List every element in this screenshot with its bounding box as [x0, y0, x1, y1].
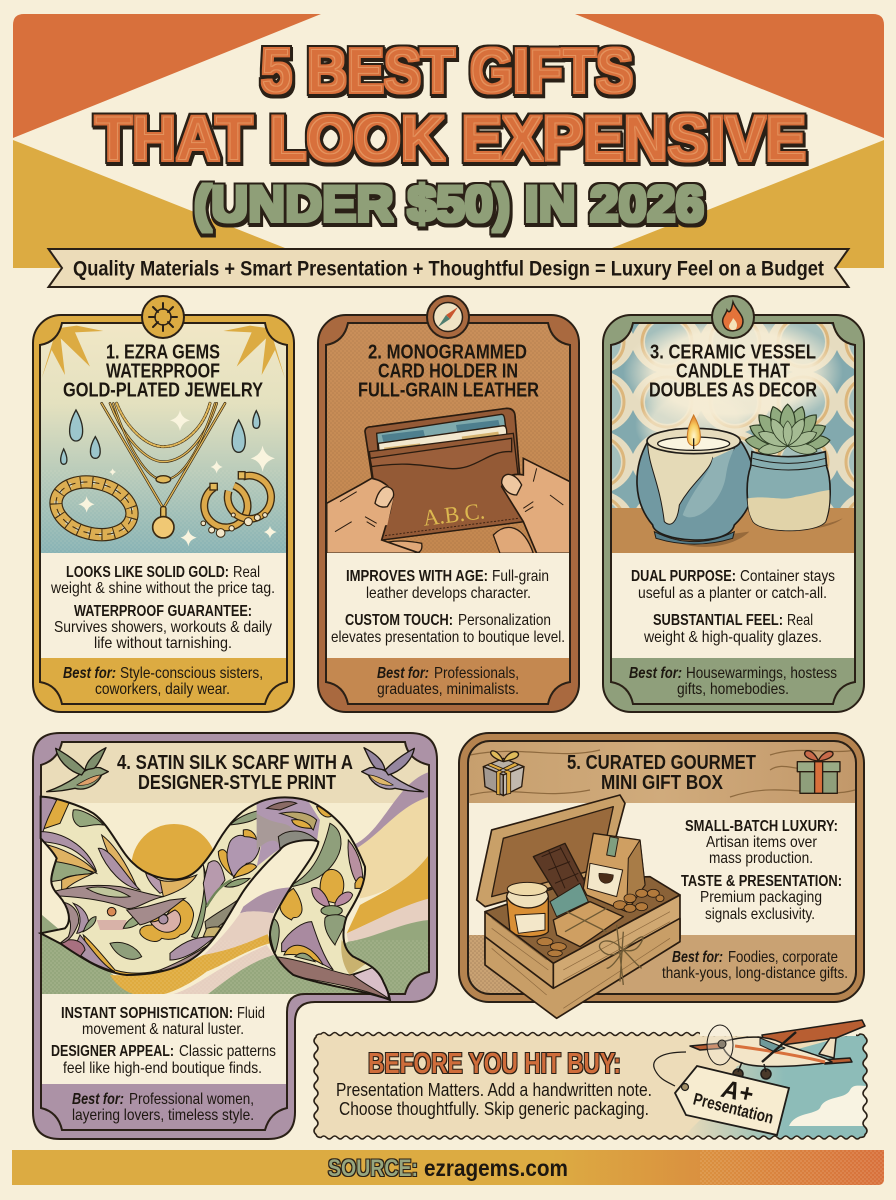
text block: best for: graduates, minimalists. — [377, 681, 519, 698]
illustration: scarf — [40, 793, 390, 1000]
text block: benefits: IMPROVES WITH AGE: — [346, 568, 488, 585]
panel: before you hit buy — [314, 1020, 870, 1140]
illustration: candle and succulent — [612, 324, 854, 658]
text block: benefits: signals exclusivity. — [705, 906, 815, 923]
text block: best for: Housewarmings, hostess — [686, 665, 837, 682]
text block: best for: Best for: — [629, 665, 682, 682]
text block: best for: Best for: — [72, 1091, 124, 1108]
header wood band — [468, 741, 856, 803]
illustration: leather card holder in hands — [326, 323, 570, 704]
heading: FULL-GRAIN LEATHER — [358, 380, 539, 402]
text block: benefits: Container stays — [740, 568, 835, 585]
text block: benefits: Real — [787, 612, 813, 629]
text block: benefits: LOOKS LIKE SOLID GOLD: — [66, 564, 229, 581]
text block: benefits: Full-grain — [492, 568, 549, 585]
text block: best for: Best for: — [377, 665, 429, 682]
heading: MINI GIFT BOX — [601, 772, 724, 794]
title: (UNDER $50) IN 2026 — [194, 176, 704, 232]
header banner — [13, 14, 884, 268]
text block: benefits: CUSTOM TOUCH: — [345, 612, 453, 629]
text block: best for — [662, 949, 848, 982]
heading: BEFORE YOU HIT BUY: — [368, 1048, 621, 1080]
icon: purple bird — [362, 748, 423, 792]
text block: benefits — [50, 564, 275, 652]
heading — [358, 342, 539, 402]
text block — [336, 1080, 652, 1119]
text block: benefits: weight & high-quality glazes. — [643, 629, 822, 646]
text block: best for: Foodies, corporate — [728, 949, 838, 966]
card frame — [33, 733, 437, 1139]
illustration: jewelry — [41, 324, 286, 658]
text block: benefits: SUBSTANTIAL FEEL: — [653, 612, 783, 629]
text block: best for — [377, 665, 519, 698]
monogram: A.B.C. — [422, 498, 486, 531]
panel: 1 Ezra Gems jewelry — [33, 296, 294, 712]
text block: benefits: movement & natural luster. — [82, 1021, 244, 1038]
heading: 1. EZRA GEMS — [106, 342, 220, 364]
heading: GOLD-PLATED JEWELRY — [63, 380, 264, 402]
text block: best for: Professionals, — [434, 665, 519, 682]
panel: 2 Monogrammed card holder — [318, 296, 579, 712]
heading: 4. SATIN SILK SCARF WITH A — [117, 752, 353, 774]
text block: benefits: DESIGNER APPEAL: — [51, 1043, 174, 1060]
text block: benefits: Survives showers, workouts & daily — [54, 619, 272, 636]
scalloped box — [314, 1032, 867, 1139]
icon: sun badge — [142, 296, 184, 338]
text block: benefits: Premium packaging — [700, 889, 822, 906]
title: 5 BEST GIFTS — [261, 37, 633, 106]
illustration: airplane — [690, 1020, 865, 1079]
text block: benefits: Personalization — [458, 612, 551, 629]
card frame — [459, 733, 864, 1002]
card frame — [318, 315, 579, 712]
icon: grey gift box — [483, 751, 524, 796]
text block: benefits: INSTANT SOPHISTICATION: — [61, 1005, 233, 1022]
text block: benefits: life without tarnishing. — [94, 635, 232, 652]
source bar: SOURCE: — [328, 1155, 418, 1182]
text block: benefits: feel like high-end boutique finds. — [63, 1060, 262, 1077]
text block: benefits — [51, 1005, 276, 1077]
sky and cloud — [689, 1034, 866, 1138]
text block: best for: Best for: — [63, 665, 116, 682]
text block: benefits: Fluid — [237, 1005, 265, 1022]
icon: green bird — [47, 748, 108, 792]
heading — [117, 752, 353, 794]
text block: benefits: useful as a planter or catch-all. — [638, 585, 827, 602]
subtitle ribbon — [48, 249, 848, 287]
heading: 2. MONOGRAMMED — [368, 342, 527, 364]
icon: compass badge — [427, 296, 469, 338]
text block: benefits: leather develops character. — [366, 585, 531, 602]
text block: benefits: DUAL PURPOSE: — [631, 568, 736, 585]
title: THAT LOOK EXPENSIVE — [95, 104, 806, 174]
yellow left panel — [13, 140, 285, 268]
text block: benefits — [331, 568, 565, 646]
text block: benefits: SMALL-BATCH LUXURY: — [685, 818, 838, 835]
title — [95, 37, 806, 232]
heading — [567, 752, 756, 794]
text block: best for: layering lovers, timeless style. — [72, 1107, 254, 1124]
heading: CARD HOLDER IN — [378, 360, 518, 382]
tag: Presentation — [691, 1089, 775, 1128]
heading: DOUBLES AS DECOR — [649, 380, 817, 402]
source bar: ezragems.com — [424, 1155, 568, 1181]
text block: benefits: Artisan items over — [706, 834, 818, 851]
yellow right panel — [612, 140, 884, 268]
text block: best for: thank-yous, long-distance gifts. — [662, 965, 848, 982]
heading: 3. CERAMIC VESSEL — [650, 342, 816, 364]
text block: benefits: Real — [233, 564, 260, 581]
tag — [675, 1066, 789, 1135]
text block: best for: coworkers, daily wear. — [95, 681, 230, 698]
text block: best for — [629, 665, 837, 698]
card frame — [603, 315, 864, 712]
illustration: landscape backdrop — [42, 743, 428, 1084]
heading: DESIGNER-STYLE PRINT — [138, 772, 336, 794]
heading: CANDLE THAT — [676, 360, 790, 382]
text block: best for: Style-conscious sisters, — [120, 665, 263, 682]
text block: best for — [72, 1091, 254, 1124]
icon: flame badge — [712, 296, 754, 338]
text block: best for — [63, 665, 263, 698]
text block: best for: Professional women, — [129, 1091, 254, 1108]
panel: 5 Curated gourmet gift box — [459, 733, 864, 1018]
string — [654, 1052, 686, 1086]
text block: benefits — [631, 568, 835, 646]
source bar — [12, 1150, 884, 1185]
text block: benefits: WATERPROOF GUARANTEE: — [74, 603, 252, 620]
text block: best for: gifts, homebodies. — [677, 681, 789, 698]
illustration: wooden gift box — [477, 795, 680, 1018]
panel: 3 Ceramic vessel candle — [603, 296, 864, 712]
text block: best for: Best for: — [672, 949, 723, 966]
text block: benefits: Classic patterns — [179, 1043, 276, 1060]
text block: benefits: weight & shine without the price tag. — [50, 580, 275, 597]
text block: benefits: mass production. — [709, 850, 813, 867]
text block: Presentation Matters. Add a handwritten note. — [336, 1080, 652, 1100]
text block: benefits — [681, 818, 842, 923]
text block: benefits: elevates presentation to boutique level. — [331, 629, 565, 646]
text block: benefits: TASTE & PRESENTATION: — [681, 873, 842, 890]
heading: 5. CURATED GOURMET — [567, 752, 756, 774]
heading: WATERPROOF — [106, 360, 220, 382]
heading — [63, 342, 264, 402]
panel: 4 Satin silk scarf — [33, 733, 437, 1140]
heading — [649, 342, 817, 402]
orange left triangle — [13, 14, 321, 138]
orange right triangle — [575, 14, 884, 138]
text block: Choose thoughtfully. Skip generic packaging. — [339, 1099, 649, 1119]
card frame — [33, 315, 294, 712]
tag: A+ — [719, 1075, 756, 1109]
icon: green gift box — [797, 751, 840, 793]
